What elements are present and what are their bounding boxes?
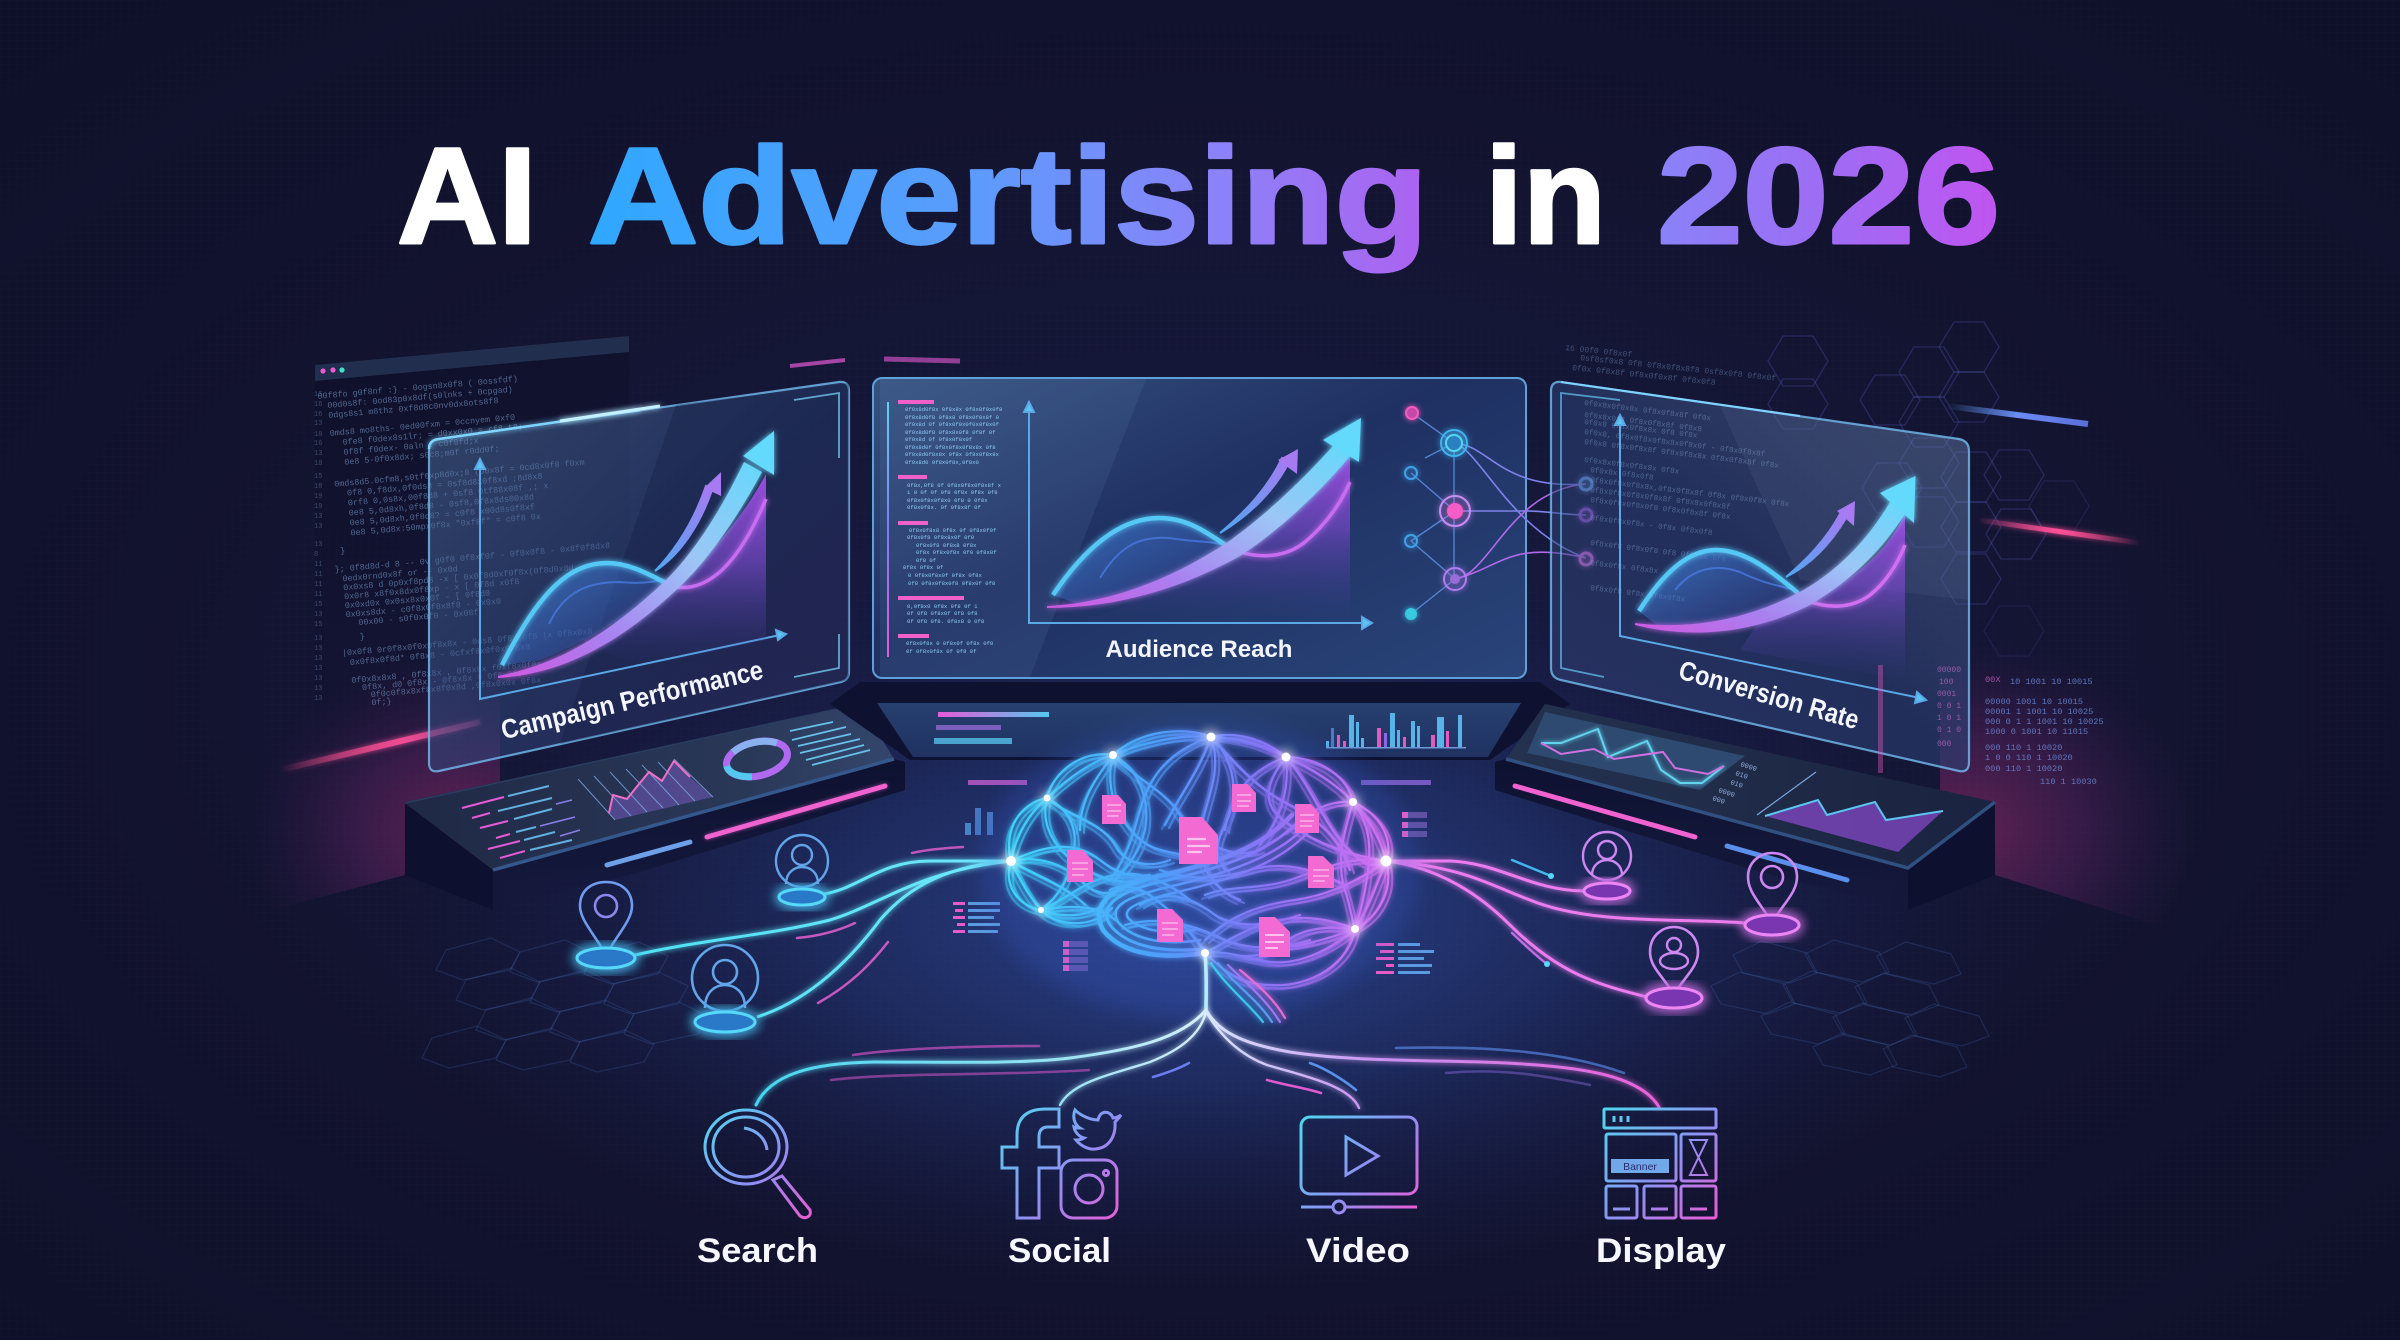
desk: left console bbox=[404, 704, 905, 910]
code text: } bbox=[359, 632, 365, 642]
code text: 00f8fo g0f8nf :} - 0ogsn8x0f8 ( 0ossfdf) bbox=[317, 374, 518, 402]
code text: 0x0xs8 d 0p0xf8pd8 -x [ 0x0f8d0xf0f8x(0f8d0x8d bbox=[343, 563, 574, 593]
accent streaks around left flows bbox=[797, 847, 963, 1003]
panel: right chart Conversion Rate bbox=[1551, 382, 1969, 773]
panel code lines: 0f0x8x 0f8x0f8 bbox=[1590, 467, 1654, 483]
code text: }; 0f8d8d-d 8 -- 0v g0f0 0f8xf0f - 0f0x0f8 - 0x8f0f8dx8 bbox=[334, 541, 611, 575]
accent streaks around right flows bbox=[1512, 860, 1554, 967]
panel: center chart Audience Reach bbox=[873, 378, 1592, 678]
data block: far right numbers: 00X bbox=[1985, 675, 2000, 685]
panel code lines: 0f0x8, 0f8x0f8x0f8x8x0f8x0f - 0f8x0f8x8f bbox=[1584, 429, 1766, 459]
icon: right location pin bbox=[1745, 853, 1799, 935]
chart screen one bbox=[1527, 712, 1745, 790]
code column: 0f0x8d 0f 0f8x0f8x0f bbox=[905, 436, 972, 443]
data block: far right numbers: 10 1001 10 10015 bbox=[2010, 677, 2093, 687]
blue hump fill bbox=[1053, 518, 1233, 605]
main arrow bbox=[1047, 418, 1361, 608]
desk front face bbox=[493, 759, 905, 910]
banner: Banner bbox=[1623, 1161, 1657, 1173]
desk: center console bbox=[830, 682, 1570, 760]
panel code lines: 0f8x0f8 0f8x 0f8x0f8x bbox=[1590, 585, 1686, 605]
code text: 0f8f f0dex- 0aln : c0f8fd;x bbox=[343, 436, 479, 458]
code text: 0f8 0,f8dx,0f0ds8 = 0sf8d8x0f8xd ;8d8x8 bbox=[347, 471, 543, 499]
chart labels: 010 bbox=[1729, 779, 1744, 791]
small arrow bbox=[655, 472, 721, 571]
neural network nodes bbox=[1405, 407, 1592, 620]
code text: 0x0f8x0f8d* 0f8x8 - 0cfxf8x0f0x0f8x8 bbox=[349, 642, 531, 668]
left flows: connectors to audience nodes bbox=[635, 861, 1012, 1017]
accent streaks bbox=[831, 1046, 1624, 1093]
code column: 0,0f8x0 0f8x 0f8 0f 1 bbox=[907, 603, 978, 610]
panel code lines: 0f0x8 0f8x0f8x8x 0f8 0f8x bbox=[1584, 419, 1698, 441]
channel labels: Display bbox=[1596, 1232, 1726, 1270]
code window line numbers bbox=[314, 391, 322, 703]
code column: 0f 0f8 0f8. 0f8x8 0 0f8 bbox=[907, 618, 984, 625]
title: AI bbox=[397, 120, 537, 273]
code column: 0 0f8x0f8x0f 0f8x 0f8x bbox=[908, 572, 982, 579]
side streaks: blue and pink light bbox=[280, 359, 2140, 770]
twitter bird bbox=[1074, 1110, 1121, 1149]
status bars bbox=[934, 712, 1049, 744]
accent bars under desks bbox=[607, 780, 1847, 880]
brain bbox=[980, 720, 1420, 1022]
icon: right audience pin with user bbox=[1646, 927, 1702, 1008]
glowing junctions bbox=[1006, 732, 1392, 957]
code window line numbers: 15 bbox=[314, 621, 322, 629]
desk screen bbox=[404, 704, 894, 870]
code column: 0f8x0f8x. 0f 0f8x8f 0f bbox=[907, 504, 981, 511]
code column bbox=[887, 400, 1002, 657]
code column: 0f8x,0f8 0f 0f8x0f8x0f8x8f x bbox=[907, 482, 1002, 489]
code text: 0f0c0f8x8xf8x8f0x8d ,0f8x0x0x 0f8x bbox=[370, 675, 541, 700]
code window line numbers: 8 bbox=[314, 551, 318, 559]
code window line numbers: 16 bbox=[314, 440, 322, 448]
window dots bbox=[320, 367, 345, 374]
title bbox=[397, 120, 2000, 273]
bar chart bbox=[1326, 713, 1466, 748]
desk surface bbox=[1506, 704, 1995, 868]
data block: far right numbers: 000 0 1 1 1001 10 10025 bbox=[1985, 717, 2104, 727]
icon: display ads bbox=[1604, 1109, 1716, 1218]
code text: } bbox=[340, 546, 346, 556]
code text: 0e8 5,0d8xh,0f8d8 - 0sf8,0f8x8ds00x8d bbox=[348, 492, 535, 518]
code window line numbers: 11 bbox=[314, 591, 322, 599]
code window line numbers: 13 bbox=[314, 523, 322, 531]
data column: 1 0 1 bbox=[1937, 714, 1961, 723]
code text: 0x0r8 x8f0x8dx0f8xp - x [ 0f8d x0f8 bbox=[344, 577, 520, 602]
code column: 1 0 0f 0f 0f8 0f8x 0f8x 0f8 bbox=[907, 489, 998, 496]
blue hump fill bbox=[502, 563, 668, 665]
inner blue line bbox=[549, 580, 665, 624]
purple area bbox=[1100, 453, 1350, 620]
data block: far right numbers bbox=[1985, 675, 2104, 787]
code text: 0mds8 mo8ths- 0ed00fxm = 0ccnyem 0xf0 bbox=[329, 413, 516, 439]
code text: 0mds8d5.0cfm8,s0tf0xp8d0x;8 (00x8f = 0cd8x0f8 f0xm bbox=[334, 458, 585, 490]
hexagon grid: upper right bbox=[1768, 322, 2089, 656]
hexagon grid: floor right bbox=[1711, 940, 1989, 1077]
code column: 0f0x8d0f8 0f8x8 0f8x0f0x8f 0 bbox=[905, 414, 1000, 421]
chart axes bbox=[475, 459, 786, 699]
chart labels: 0000 bbox=[1717, 787, 1736, 800]
code window line numbers: 15 bbox=[314, 473, 322, 481]
screen text lines bbox=[462, 786, 580, 858]
icon: left audience user one bbox=[776, 835, 828, 905]
icon: social bbox=[1002, 1109, 1121, 1218]
code window line numbers: 13 bbox=[314, 420, 322, 428]
data block: far right numbers: 000 110 1 10020 bbox=[1985, 743, 2062, 753]
code text: 00x00 - s0f0x0f0 - 0x08f bbox=[358, 608, 479, 628]
code column: 0f8x0f8 0f8x8x0f 0f0 bbox=[907, 534, 975, 541]
inner blue line bbox=[1675, 568, 1795, 590]
mini widgets beside brain bbox=[953, 808, 1434, 974]
blue curve bbox=[1639, 550, 1798, 611]
code text: 0rf8 0,0s8x,00f8d8 + 0sf8 0tf88x08f ,; x bbox=[348, 481, 549, 508]
panel code lines: 0f8x0f8 0f8x0f8 0f8 0f8x8x 0f8 bbox=[1590, 540, 1727, 565]
icon: search magnifier bbox=[705, 1110, 810, 1218]
code column: 0f 0f8 0f8x0f 0f8 0f8 bbox=[907, 610, 978, 617]
background bbox=[258, 208, 2181, 1264]
chart labels: 0000 bbox=[1739, 761, 1758, 774]
code column: 0f0x8d0f8 0f8x8x0f8 0f8f 0f bbox=[905, 429, 996, 436]
code text: 0fe8 f0dex8s1lr; = d0xx0x0 = rf8 t8; bbox=[342, 422, 523, 448]
label: Campaign Performance bbox=[498, 655, 766, 745]
code window line numbers: 15 bbox=[314, 391, 322, 399]
code window line numbers: 18 bbox=[314, 483, 322, 491]
pink curve bbox=[1806, 545, 1905, 606]
panel: right background code lines bbox=[1565, 344, 1777, 388]
channel labels: Video bbox=[1306, 1232, 1410, 1270]
code text: |0x0f8 0r0f8x0f0x0f8x8x - 0ds8 0f8xf0f8 |x 0f8x0x8 bbox=[342, 627, 593, 659]
panel code lines: 0f8x0f8x0f8x - 0f8x 0f8x0f8 bbox=[1590, 515, 1713, 538]
data block: far right numbers: 000 110 1 10020 bbox=[1985, 764, 2062, 774]
code window line numbers: 13 bbox=[314, 675, 322, 683]
code column: 0f8 0f bbox=[916, 557, 936, 564]
inner bracket bbox=[1561, 393, 1620, 677]
chart labels: 000 bbox=[1711, 795, 1726, 807]
code window line numbers: 19 bbox=[314, 503, 322, 511]
pink curve bbox=[1240, 482, 1350, 556]
sheen bbox=[560, 383, 849, 744]
blue hump fill bbox=[1639, 550, 1798, 628]
code window line numbers: 18 bbox=[314, 460, 322, 468]
desk: right console bbox=[1495, 704, 1995, 910]
panel code lines: 0f0x8x0f8x0f8x8x 0f8x bbox=[1584, 457, 1680, 477]
code window line numbers: 13 bbox=[314, 685, 322, 693]
code column: 0f0x8d0f8x8x 0f8x 0f8x0f8x8x bbox=[905, 451, 1000, 458]
code column: 0f0x8d0f8x 0f8x8x 0f8x0f0x0f8 bbox=[905, 406, 1002, 413]
channel labels bbox=[697, 1232, 1726, 1270]
code text: 0e8 5,0d8xh,0f8d8? = c0f8 x00d8s0f8xf bbox=[349, 502, 535, 528]
code window line numbers: 13 bbox=[314, 695, 322, 703]
icon: left audience user two bbox=[692, 945, 758, 1032]
code text: 00d0s8f: 0od83p0x8df(s0lnks + 0cpgad) bbox=[327, 385, 513, 411]
small arrow bbox=[1220, 449, 1298, 533]
data column: 0 0 1 bbox=[1937, 702, 1961, 711]
data column bbox=[1937, 666, 1961, 749]
code window line numbers: 13 bbox=[314, 450, 322, 458]
panel: code window behind left chart bbox=[314, 336, 629, 800]
code window line numbers: 13 bbox=[314, 645, 322, 653]
blue curve bbox=[1053, 518, 1233, 595]
code window line numbers: 13 bbox=[314, 611, 322, 619]
panel: left chart Campaign Performance bbox=[429, 382, 849, 771]
code text: 0x0xd0x 0x0sx8x0x0f - [ 0f8d0 bbox=[345, 588, 491, 611]
label: Conversion Rate bbox=[1675, 655, 1863, 735]
code column: 0f 0f8x0f8x 0f 0f8 0f bbox=[906, 648, 976, 655]
data column: 00000 bbox=[1937, 666, 1961, 675]
panel code lines: 0f8x0f8x 0f8x8x bbox=[1590, 560, 1659, 576]
screen list bbox=[790, 722, 870, 765]
channel labels: Search bbox=[697, 1232, 818, 1270]
purple area bbox=[580, 474, 766, 668]
code window line numbers: 11 bbox=[314, 581, 322, 589]
chart labels: 010 bbox=[1734, 770, 1749, 782]
code column: 0f8x0f8x0f8x0 0f8 0 0f8x bbox=[907, 497, 988, 504]
code window line numbers: 13 bbox=[314, 541, 322, 549]
channel labels: Social bbox=[1008, 1232, 1111, 1270]
code window line numbers: 16 bbox=[314, 411, 322, 419]
code text: 0dgs8s1 m8thz 0xf8d8c0nv0dx8ots8f8 bbox=[328, 396, 499, 421]
icon: right audience user one bbox=[1583, 832, 1631, 899]
data column: 000 bbox=[1937, 740, 1952, 749]
code column: 0f0x8d0 0f8x0f8x,0f8x0 bbox=[905, 459, 979, 466]
facebook f bbox=[1002, 1109, 1059, 1218]
main arrow bbox=[1635, 476, 1916, 633]
code window line numbers: 15 bbox=[314, 601, 322, 609]
title: 2026 bbox=[1657, 120, 2000, 273]
code window line numbers: 13 bbox=[314, 665, 322, 673]
desk left side face bbox=[405, 803, 493, 910]
code text: 0x0xs8dx - c0f8x0f8x8f8 - 0x0x0 bbox=[345, 597, 501, 620]
icon: left location pin bbox=[577, 882, 635, 968]
data block: far right numbers: 110 1 10030 bbox=[2040, 777, 2097, 787]
blue curve bbox=[502, 563, 668, 665]
code window line numbers: 16 bbox=[314, 401, 322, 409]
data column: 0 1 0 bbox=[1937, 726, 1961, 735]
channel connectors from brain to icons bbox=[756, 1010, 1659, 1108]
brain strands bbox=[1006, 731, 1392, 989]
panel code lines: 0f8x0f8x0f8x0f8x8f 0f8x8x0f8x8f bbox=[1590, 487, 1731, 512]
hexagon grid: floor left bbox=[422, 938, 708, 1072]
small arrow bbox=[1786, 501, 1855, 577]
instagram bbox=[1061, 1160, 1117, 1218]
panel code lines: 0f0x8x0f8 0f8x0f8x8f 0f8x8 bbox=[1584, 412, 1703, 434]
code window line numbers: 11 bbox=[314, 561, 322, 569]
label: Audience Reach bbox=[1106, 636, 1292, 663]
brainstem bbox=[1205, 953, 1285, 1022]
code text: 0e8 5,0d8x:50mpx0f8x "0xf8f" = c0f8 0x bbox=[350, 512, 541, 538]
data block: far right numbers: 1000 0 1001 10 11015 bbox=[1985, 727, 2088, 737]
code column: 0f8x0f8x 0 0f8x0f 0f8x 0f8 bbox=[906, 640, 993, 647]
inner blue line bbox=[1100, 538, 1225, 578]
right flows: connectors to audience nodes bbox=[1387, 861, 1745, 997]
code text bbox=[317, 368, 622, 711]
purple area bbox=[1740, 513, 1905, 680]
panel code lines: 0f0x8 0f8x0f8x8f 0f8x0f8x8x 0f8x0f8x8f 0f8x bbox=[1584, 439, 1780, 471]
pink curve bbox=[668, 499, 766, 587]
document icons bbox=[1067, 784, 1334, 957]
code text: 0f0x8x8x8 , 0f8x8x , 0f8x8x f0xf8x0f8x bbox=[351, 659, 542, 686]
panel code lines: 0f8x0f8x0f8x8x,0f8x0f8x8f 0f8x 0f8x0f8x 0f8x bbox=[1590, 477, 1790, 509]
code column: 0f0x8d0f 0f8x0f8x0f8x8x 0f8 bbox=[905, 444, 996, 451]
code window line numbers: 11 bbox=[314, 571, 322, 579]
code window title bar bbox=[315, 336, 629, 381]
code window line numbers: 19 bbox=[314, 493, 322, 501]
data block: far right numbers: 00000 1001 10 10015 bbox=[1985, 697, 2083, 707]
icon: video bbox=[1301, 1117, 1417, 1213]
screen mini chart bbox=[578, 759, 713, 820]
data block: far right numbers: 00001 1 1001 10 10025 bbox=[1985, 707, 2093, 717]
chart labels bbox=[1711, 761, 1758, 807]
panel: right background code lines: 0sf8sf0x8 0f8 0f8x0f8x8f8 0sf8x0f8 0f8x0f bbox=[1580, 354, 1777, 384]
panel: right background code lines: 0f0x 0f8x8f 0f8x0f0x8f 0f8x0f8 bbox=[1572, 364, 1716, 388]
title: in bbox=[1485, 120, 1606, 273]
code window line numbers: 13 bbox=[314, 655, 322, 663]
code window line numbers: 13 bbox=[314, 513, 322, 521]
chart axes bbox=[1024, 402, 1372, 629]
code column: 0f8x 0f8x0f8x 0f0 0f8x8f bbox=[916, 549, 997, 556]
data block: far right numbers: 1 0 0 110 1 10020 bbox=[1985, 753, 2073, 763]
desk front face bbox=[1495, 759, 1908, 910]
panel code lines: 0f8x0f8x0f8x0f8 0f8x0f8x8f 0f8x bbox=[1590, 497, 1731, 522]
code window line numbers: 13 bbox=[314, 635, 322, 643]
code text: 0e8 5-0f0x8dx; s0c8;m0f r0dd0f; bbox=[344, 444, 500, 468]
lateral sulcus band bbox=[1099, 815, 1308, 956]
code column: 0f8x 0f8x 0f bbox=[903, 564, 943, 571]
code text: 0edx0rnd0x8f or -- 0x0d bbox=[342, 564, 458, 584]
code column: 0f8x0f8x8 0f8x 0f 0f8x0f0f bbox=[909, 527, 996, 534]
data column: 0001 bbox=[1937, 690, 1956, 699]
main arrow bbox=[498, 431, 774, 678]
code text: 0f;} bbox=[371, 696, 392, 708]
code column: 0f8x0f8 0f8x8 0f8x bbox=[916, 542, 977, 549]
code window line numbers: 18 bbox=[314, 431, 322, 439]
sheen bbox=[1720, 406, 1968, 600]
code column: 0f8 0f8x0f8x0f8 0f8x0f 0f8 bbox=[908, 580, 995, 587]
screen donut bbox=[723, 735, 791, 783]
code text: 0f8x, d0 0f8x - 0f8x8x = 0f8x0f8 bbox=[362, 669, 523, 693]
pink vertical marker bbox=[1878, 665, 1883, 773]
panel code lines: 0f0x8x0f0x8x 0f8x0f8x8f 0f0x bbox=[1584, 400, 1712, 424]
data column: 100 bbox=[1939, 678, 1954, 687]
title: Advertising bbox=[588, 120, 1428, 273]
chart axes bbox=[1615, 415, 1926, 703]
panel code lines bbox=[1584, 400, 1790, 605]
desk right side face bbox=[1908, 802, 1995, 910]
panel: right background code lines: 16 00f0 0f8x0f bbox=[1565, 344, 1633, 360]
chart screen two bbox=[1757, 772, 1943, 852]
inner bracket corners bbox=[794, 393, 839, 677]
code column: 0f0x8d 0f 0f8x0f0x0f0x0f8x0f bbox=[905, 421, 999, 428]
